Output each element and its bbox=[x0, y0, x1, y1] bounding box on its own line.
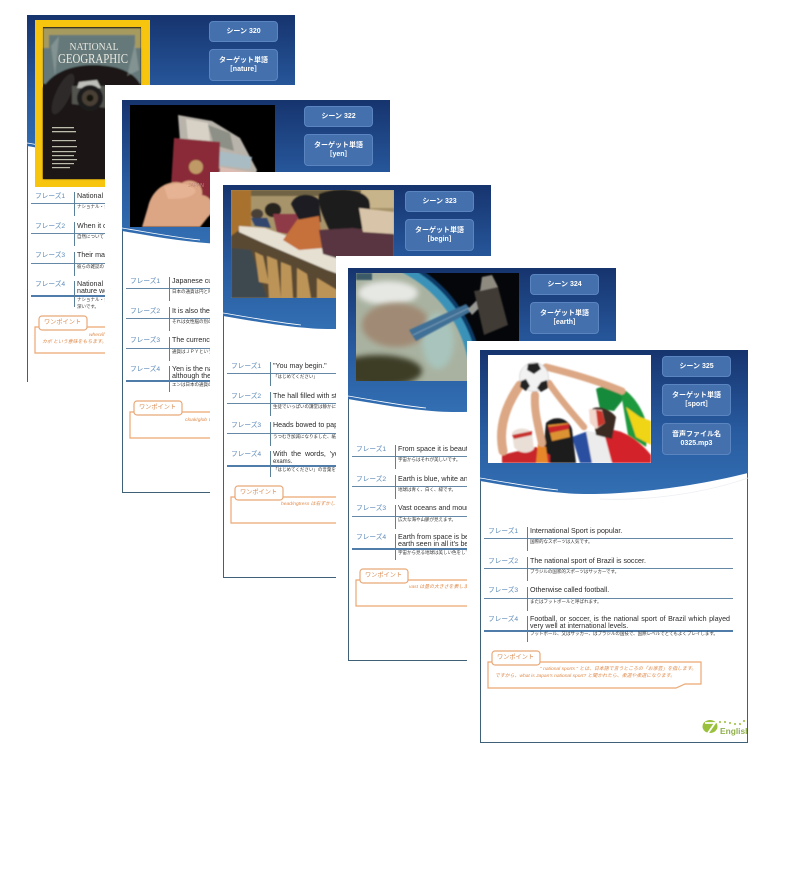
button: scene number bbox=[304, 106, 373, 127]
callout: one point bbox=[230, 485, 336, 524]
phrase rows: Earth from space is beau bbox=[398, 533, 477, 541]
callout: one point: ワンポイント bbox=[139, 404, 176, 411]
photo: passport and yen notes bbox=[130, 105, 275, 227]
photo: National Geographic cover bbox=[35, 20, 150, 187]
logo: 7 English bbox=[702, 720, 747, 736]
header band bbox=[122, 100, 390, 244]
button: target word: ［earth］ bbox=[549, 319, 580, 326]
phrase rows: Earth is blue, white and bbox=[398, 475, 472, 483]
phrase rows: 「はじめてください」 bbox=[273, 374, 318, 379]
phrase rows: フレーズ2 bbox=[35, 223, 65, 230]
phrase rows: National G bbox=[77, 192, 111, 200]
phrase rows: フレーズ3 bbox=[35, 252, 65, 259]
phrase rows: フレーズ4 bbox=[35, 281, 65, 288]
callout: one point bbox=[34, 315, 106, 354]
phrase rows: フレーズ2 bbox=[356, 476, 386, 483]
button: target word: ターゲット単語 bbox=[219, 56, 268, 64]
phrase rows: ブラジルの国家的スポーツはサッカーです。 bbox=[530, 569, 619, 574]
button: scene number: シーン 320 bbox=[226, 28, 261, 35]
header band bbox=[348, 268, 616, 412]
phrase rows: Vast oceans and mounta bbox=[398, 504, 476, 512]
button: target word bbox=[405, 219, 474, 251]
phrase rows: Japanese curre bbox=[172, 277, 221, 285]
button: target word: ［sport］ bbox=[681, 401, 712, 408]
phrase rows: 宇宙から見る地球は美しい色をしています bbox=[398, 550, 483, 555]
phrase rows: 通貨はＪＰＹという記号 bbox=[172, 349, 222, 354]
button: scene number: シーン 323 bbox=[422, 198, 457, 205]
phrase rows: フットボール、又はサッカー、はブラジルの国技で、国際レベルでとてもよくプレイします。 bbox=[530, 631, 718, 636]
callout: one point bbox=[129, 400, 213, 439]
button: audio file name: 音声ファイル名 bbox=[672, 430, 721, 438]
button: target word: ターゲット単語 bbox=[314, 142, 363, 148]
phrase rows: フレーズ1 bbox=[130, 278, 160, 285]
photo: National Geographic cover: GEOGRAPHIC bbox=[58, 51, 128, 66]
phrase rows: フレーズ3 bbox=[356, 505, 386, 512]
phrase rows: フレーズ3 bbox=[488, 587, 518, 594]
button: target word: ［yen］ bbox=[325, 151, 352, 158]
callout: one point bbox=[487, 650, 702, 689]
callout: one point: ですから、what is Japan's national sport? と聞かれたら、柔道や柔道になります。 bbox=[495, 674, 675, 679]
panel: scene 320 slide bbox=[27, 15, 295, 383]
phrase rows: フレーズ1 bbox=[35, 193, 65, 200]
button: target word: ターゲット単語 bbox=[540, 310, 589, 316]
phrase rows: うつむき加減になりました、紙に向かい bbox=[273, 434, 354, 439]
panel: scene 325 slide bbox=[467, 341, 762, 753]
phrase rows: "You may begin." bbox=[273, 362, 327, 370]
button: audio file name: 0325.mp3 bbox=[681, 440, 712, 447]
phrase rows: From space it is beautiful bbox=[398, 445, 477, 453]
button: scene number: シーン 324 bbox=[547, 281, 582, 288]
phrase rows: Heads bowed to pape bbox=[273, 421, 342, 429]
phrase rows bbox=[352, 445, 483, 560]
button: audio file name bbox=[662, 423, 731, 455]
phrase rows: although the bbox=[172, 372, 211, 380]
button: scene number bbox=[662, 356, 731, 377]
phrase rows: それは女性脳の別の名前 bbox=[172, 319, 222, 324]
button: target word: ［nature］ bbox=[226, 66, 261, 73]
phrase rows bbox=[31, 192, 113, 308]
callout: one point: vast は量の大きさを表します bbox=[409, 585, 473, 590]
phrase rows bbox=[227, 362, 358, 477]
callout: one point bbox=[355, 568, 473, 607]
phrase rows: 広大な海や山脈が見えます。 bbox=[398, 517, 456, 522]
button: scene number bbox=[405, 191, 474, 212]
phrase rows: It is also the sy bbox=[172, 307, 219, 315]
callout: one point: when/if bbox=[89, 333, 104, 338]
phrase rows: earth seen in all it's beau bbox=[398, 540, 476, 548]
button: scene number bbox=[530, 274, 599, 295]
phrase rows: exams. bbox=[273, 459, 292, 465]
phrase rows: 彼らの雑誌の bbox=[77, 264, 104, 269]
callout: one point: ワンポイント bbox=[365, 572, 402, 579]
phrase rows: 深いです。 bbox=[77, 304, 99, 308]
button: target word bbox=[530, 302, 599, 334]
phrase rows: 自然について bbox=[77, 234, 104, 239]
header band bbox=[223, 185, 491, 329]
phrase rows: Yen is the nam bbox=[172, 365, 219, 373]
phrase rows: International Sport is popular. bbox=[530, 527, 622, 535]
photo: students taking an exam bbox=[231, 190, 394, 298]
callout: one point: カボ という意味をもちます。 bbox=[42, 340, 106, 345]
phrase rows: The national sport of Brazil is soccer. bbox=[530, 557, 646, 565]
button: target word bbox=[304, 134, 373, 166]
phrase rows: 宇宙からはそれが美しいです。 bbox=[398, 457, 460, 462]
callout: one point: ワンポイント bbox=[240, 489, 277, 496]
header band bbox=[480, 350, 748, 500]
phrase rows: 地球は青く、白く、緑です。 bbox=[398, 487, 456, 492]
panel: scene 322 slide bbox=[105, 85, 395, 510]
phrase rows: Football, or soccer, is the national sport of Brazil which played bbox=[530, 615, 730, 623]
button: target word: ターゲット単語 bbox=[415, 226, 464, 234]
phrase rows: The currency bbox=[172, 336, 213, 344]
phrase rows: Their maga bbox=[77, 251, 113, 259]
phrase rows: very well at international levels. bbox=[530, 622, 628, 630]
phrase rows: 生徒でいっぱいの講堂は静かになりました bbox=[273, 404, 358, 409]
phrase rows: nature wo bbox=[77, 287, 108, 295]
phrase rows: フレーズ2 bbox=[488, 558, 518, 565]
phrase rows: エンは日本の通貨の名前 bbox=[172, 382, 222, 387]
phrase rows: ナショナル・ジオ bbox=[77, 297, 113, 302]
phrase rows bbox=[484, 527, 733, 642]
phrase rows: フレーズ4 bbox=[488, 616, 518, 623]
button: scene number: シーン 322 bbox=[321, 113, 356, 120]
callout: one point: ワンポイント bbox=[44, 319, 81, 326]
button: scene number bbox=[209, 21, 278, 42]
photo: National Geographic cover: NATIONAL bbox=[70, 42, 118, 53]
phrase rows: フレーズ4 bbox=[356, 534, 386, 541]
photo: passport and yen notes: JAPAN bbox=[188, 183, 204, 189]
button: target word: ターゲット単語 bbox=[672, 392, 721, 398]
photo: soccer fans with painted faces bbox=[488, 355, 651, 463]
button: scene number: シーン 325 bbox=[679, 363, 714, 370]
phrase rows: National G bbox=[77, 280, 111, 288]
phrase rows: フレーズ1 bbox=[356, 446, 386, 453]
button: target word bbox=[209, 49, 278, 81]
phrase rows: フレーズ2 bbox=[231, 393, 261, 400]
phrase rows: When it co bbox=[77, 222, 111, 230]
phrase rows: 「はじめてください」の言葉を聞いて bbox=[273, 467, 349, 472]
photo: earth and satellite bbox=[356, 273, 519, 381]
phrase rows: Otherwise called football. bbox=[530, 586, 609, 594]
button: target word: ［begin］ bbox=[423, 236, 456, 243]
panel: scene 324 slide bbox=[336, 256, 626, 671]
phrase rows bbox=[126, 277, 222, 392]
button: target word bbox=[662, 384, 731, 416]
phrase rows: ナショナル・ジオ bbox=[77, 204, 113, 209]
phrase rows: フレーズ4 bbox=[231, 451, 261, 458]
phrase rows: 日本の通貨は円と呼ばれ bbox=[172, 289, 222, 294]
phrase rows: またはフットボールと呼ばれます。 bbox=[530, 599, 602, 604]
phrase rows: フレーズ3 bbox=[130, 337, 160, 344]
phrase rows: The hall filled with stud bbox=[273, 392, 345, 400]
phrase rows: With the words, 'you bbox=[273, 450, 343, 458]
header band bbox=[27, 15, 295, 148]
callout: one point: ワンポイント bbox=[497, 654, 534, 661]
phrase rows: フレーズ1 bbox=[231, 363, 261, 370]
callout: one point: cloak/glob は bbox=[185, 418, 213, 423]
phrase rows: フレーズ4 bbox=[130, 366, 160, 373]
panel: scene 323 slide bbox=[210, 172, 495, 587]
phrase rows: フレーズ3 bbox=[231, 422, 261, 429]
callout: one point: " national sports " とは、日本語で言うところの「お家芸」を指します。 bbox=[540, 667, 696, 672]
phrase rows: フレーズ2 bbox=[130, 308, 160, 315]
phrase rows: フレーズ1 bbox=[488, 528, 518, 535]
callout: one point: head/ngtress は右ずかし bbox=[281, 502, 335, 507]
phrase rows: 国際的なスポーツは人気です。 bbox=[530, 539, 592, 544]
